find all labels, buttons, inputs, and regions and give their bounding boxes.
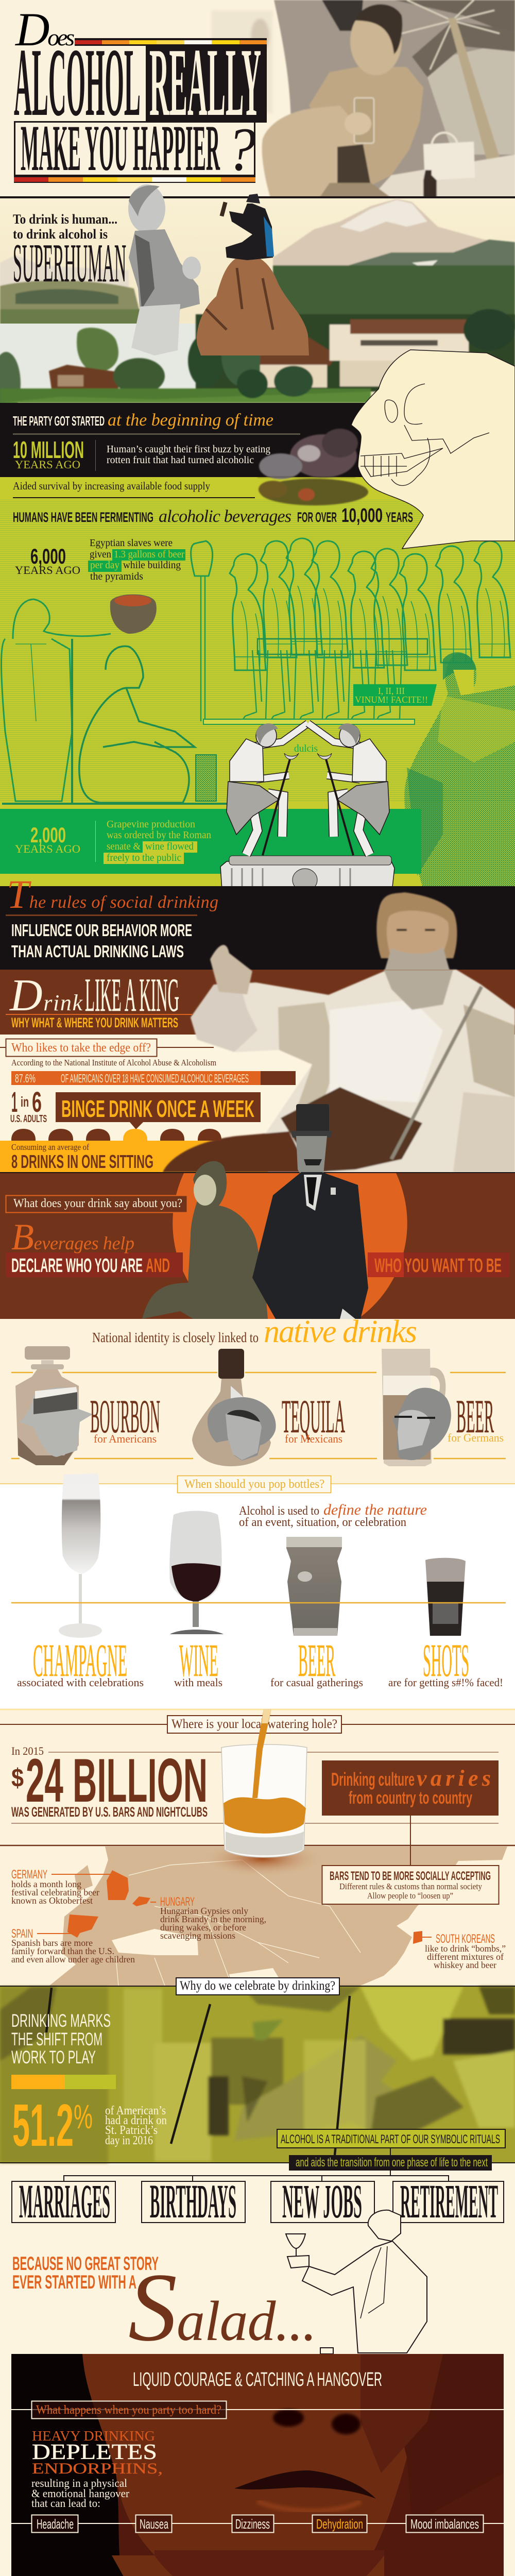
- text: st patricks: of American’s: [105, 2104, 166, 2117]
- panel: native drinks: BOURBON: [90, 1390, 160, 1443]
- band: 2,000 years ago: [0, 809, 421, 874]
- illustration: beer mug: [382, 1349, 451, 1466]
- label: spain: [11, 1927, 135, 1964]
- panel: when should you pop bottles: [0, 1473, 515, 1709]
- box: marriages: [12, 2175, 115, 2228]
- text: was generated: WAS GENERATED BY U.S. BARS AND NIGHTCLUBS: [11, 1804, 208, 1820]
- panel: native drinks: TEQUILA: [282, 1390, 345, 1443]
- illustration: statue: [128, 184, 201, 355]
- heading: heavy drinking depletes endorphins: ENDORPHINS,: [32, 2460, 163, 2477]
- label: spain: family forward than the U.S.: [11, 1946, 114, 1956]
- label: spain: and even allow under age children: [11, 1954, 135, 1964]
- text: alcohol is used: Alcohol is used to: [239, 1504, 319, 1518]
- text: resulting in: that can lead to:: [31, 2497, 100, 2510]
- text: national identity: National identity is closely linked to: [92, 1330, 259, 1345]
- label: south koreans: [425, 1932, 506, 1970]
- colour stripe bar bottom: [14, 175, 255, 183]
- band: 2,000 years ago: was ordered by the Roman: [107, 829, 211, 841]
- heading: to drink is human: To drink is human...: [13, 212, 117, 227]
- callout: drinking culture varies: Drinking culture: [331, 1769, 415, 1790]
- illustration: king face: [376, 892, 457, 974]
- callout box: who likes to take the edge off: Who likes to take the edge off?: [11, 1041, 151, 1055]
- label: germany: known as Oktoberfest: [11, 1895, 93, 1906]
- word: dulcis: dulcis: [294, 743, 318, 754]
- map: hungary: [132, 1896, 150, 1906]
- word: Does: Does: [14, 3, 75, 56]
- band right: [368, 1252, 509, 1277]
- heading: heavy drinking depletes endorphins: DEPLETES: [32, 2441, 157, 2464]
- stat: 1 in 6 adults: 1: [11, 1086, 18, 1118]
- heading: no great story: BECAUSE NO GREAT STORY: [12, 2253, 159, 2274]
- rule: [11, 1602, 506, 1603]
- left man: [227, 723, 308, 855]
- symptom: mood imbalances: Mood imbalances: [410, 2516, 479, 2532]
- callout box: bars tend: Different rules & customs than normal society: [339, 1882, 482, 1891]
- band left: [6, 1252, 183, 1277]
- caption: for mexicans: for Mexicans: [285, 1432, 342, 1445]
- band: 2,000 years ago: senate &: [107, 841, 141, 852]
- band: 2,000 years ago: wine flowed: [145, 841, 194, 852]
- heading: to drink alcohol is: to drink alcohol is: [13, 227, 108, 242]
- callout box: who likes to take the edge off: [0, 1039, 214, 1056]
- stat: 1 in 6 adults: [10, 1086, 47, 1125]
- label: germany: GERMANY: [11, 1868, 47, 1882]
- stat: 51.2 percent: 51.2: [12, 2092, 74, 2159]
- text: resulting in: & emotional hangover: [31, 2487, 130, 2500]
- box: make you happier: ?: [227, 115, 256, 183]
- script: Drink: Drink: [9, 971, 83, 1021]
- text: consuming an average: Consuming an average of: [11, 1142, 89, 1152]
- text: egyptian slaves with highlight: the pyramids: [90, 571, 143, 582]
- text: egyptian slaves with highlight: 1.3 gallons of beer: [114, 549, 184, 560]
- panel: when should you pop bottles: CHAMPAGNE: [33, 1635, 127, 1686]
- heading: for over: FOR OVER: [297, 510, 337, 525]
- symptom: nausea: Nausea: [140, 2516, 168, 2532]
- text: egyptian slaves with highlight: [88, 537, 185, 582]
- label: spain: SPAIN: [11, 1927, 33, 1941]
- dark panel behind REALLY: [146, 45, 267, 123]
- panel: drink like a king: LIKE A KING: [85, 969, 179, 1021]
- illustration: king body: [163, 945, 515, 1172]
- rule: [13, 497, 255, 498]
- script: beverages help: Beverages help: [11, 1216, 134, 1258]
- callout: binge drink: [56, 1092, 261, 1129]
- text: egyptian slaves with highlight: per day: [90, 560, 119, 571]
- stat: 1 in 6 adults: U.S. ADULTS: [10, 1113, 47, 1125]
- heading: drinking marks the shift: WORK TO PLAY: [11, 2047, 96, 2067]
- photo: cocktails at a bar: [0, 1987, 515, 2163]
- callout box: what does your drink say: What does your drink say about you?: [13, 1197, 182, 1210]
- illustration: tequila bottle: [192, 1349, 276, 1466]
- illustration: procession of workers: [191, 538, 510, 724]
- heading: heavy drinking depletes endorphins: [32, 2428, 163, 2477]
- heading: drinking marks the shift: [11, 2011, 111, 2067]
- text: egyptian slaves with highlight: while building: [123, 560, 181, 571]
- symptom: nausea: [136, 2515, 172, 2533]
- map: south korea: [413, 1931, 422, 1944]
- subheading: why what where: WHY WHAT & WHERE YOU DRINK MATTERS: [11, 1015, 178, 1030]
- label: germany: [11, 1868, 99, 1906]
- text: st patricks: day in 2016: [105, 2134, 153, 2147]
- panel: life transitions: [12, 2148, 504, 2362]
- photo: man under umbrella: [262, 0, 515, 198]
- bar: 51.2 percent: [11, 2075, 116, 2089]
- caption: casual gatherings: for casual gatherings: [270, 1676, 363, 1689]
- label: hungary: HUNGARY: [160, 1895, 195, 1909]
- panel: native drinks: [0, 1314, 515, 1484]
- heading: heavy drinking depletes endorphins: HEAVY DRINKING: [32, 2428, 155, 2444]
- stat: 6,000 years ago: YEARS AGO: [15, 564, 80, 577]
- panel: drink like a king: [0, 945, 515, 1173]
- panel: liquid courage dark poster: [0, 2354, 504, 2576]
- caption: celebrations: associated with celebrations: [17, 1676, 144, 1689]
- script: rules of social drinking: The rules of social drinking: [7, 872, 218, 917]
- label: years ago: YEARS AGO: [15, 458, 80, 471]
- panel: superhuman landscape: [0, 184, 515, 416]
- stat: 24 billion: 24 BILLION: [26, 1746, 208, 1815]
- map: europe and asia: [0, 1841, 515, 1986]
- map: spain: [67, 1914, 98, 1938]
- symptom: mood imbalances: [406, 2515, 483, 2533]
- illustration: roman statue: [404, 652, 515, 886]
- illustration: man with bottle: [220, 194, 274, 260]
- label: germany: holds a month long: [11, 1879, 81, 1889]
- panel: life transitions: BIRTHDAYS: [150, 2175, 236, 2228]
- panel: beginning of time: [0, 403, 515, 477]
- circle backdrop: [173, 1173, 407, 1319]
- bar: 87.6 percent: [11, 1071, 296, 1085]
- illustration: rock: [197, 255, 309, 355]
- callout box: bars tend: Allow people to “loosen up”: [367, 1891, 453, 1901]
- text: aided survival: Aided survival by increasing available food supply: [13, 480, 210, 492]
- script: salad: Salad...: [128, 2253, 317, 2362]
- panel: when should you pop bottles: BEER: [298, 1635, 335, 1686]
- illustration: man in top hat: [252, 1104, 368, 1319]
- panel: rules of social drinking: [0, 872, 515, 974]
- face: man with sombrero: [208, 1397, 276, 1461]
- symptom: headache: Headache: [37, 2516, 74, 2532]
- illustration: shot glass: [425, 1558, 466, 1636]
- text: st patricks: [105, 2104, 167, 2147]
- script: define the nature: define the nature: [323, 1501, 427, 1518]
- illustration: skull: [351, 350, 515, 549]
- illustration: rotting grapes: [258, 429, 368, 505]
- band: 2,000 years ago: freely to the public: [107, 852, 181, 863]
- callout box: bars tend: [322, 1866, 499, 1904]
- heading: and: AND: [146, 1255, 170, 1277]
- callout box: watering hole: Where is your local watering hole?: [171, 1717, 337, 1731]
- label: hungary: [160, 1895, 266, 1941]
- text: according to: According to the National Institute of Alcohol Abuse & Alcoholism: [11, 1058, 216, 1067]
- rule lines: [11, 1372, 506, 1459]
- map: glow under glass: [201, 1841, 324, 1877]
- bar: 87.6 percent: 87.6%: [15, 1072, 36, 1085]
- straws: [46, 1988, 350, 2155]
- heading: influence: INFLUENCE OUR BEHAVIOR MORE: [11, 921, 192, 940]
- heading: drinking marks the shift: THE SHIFT FROM: [11, 2029, 102, 2049]
- symptom: dizziness: Dizziness: [235, 2516, 270, 2532]
- panel: lime history section: [0, 477, 515, 886]
- illustration: face detail: [194, 1175, 216, 1206]
- callout box: pop bottles: When should you pop bottles?: [184, 1478, 324, 1491]
- stat: 10 million: 10 MILLION: [13, 436, 84, 463]
- caption: for americans: for Americans: [94, 1432, 157, 1445]
- illustration: toasting man line art: [286, 2210, 427, 2354]
- symptom: dehydration: [312, 2515, 367, 2533]
- faded background photo: [211, 10, 273, 113]
- callout: vinum facite: VINUM! FACITE!!: [355, 694, 428, 705]
- face: straw hat man: [20, 1387, 93, 1457]
- label: hungary: Hungarian Gypsies only: [160, 1906, 248, 1916]
- text: resulting in: resulting in a physical: [31, 2477, 127, 2489]
- stat: 1 in 6 adults: in: [21, 1094, 29, 1110]
- box: birthdays: [142, 2175, 245, 2228]
- band: 2,000 years ago: 2,000: [30, 823, 66, 847]
- bar: 87.6 percent: OF AMERICANS OVER 18 HAVE CONSUMED ALCOHOLIC BEVERAGES: [61, 1072, 249, 1085]
- text: st patricks: St. Patrick’s: [105, 2124, 158, 2137]
- text: of an event: of an event, situation, or celebration: [239, 1516, 406, 1529]
- panel: superhuman landscape: SUPERHUMAN: [13, 233, 126, 293]
- caption: for germans: for Germans: [448, 1431, 504, 1444]
- stat: 6,000 years ago: [15, 544, 80, 577]
- illustration: clay pot: [110, 595, 157, 634]
- heading: no great story: [12, 2253, 159, 2293]
- text: egyptian slaves with highlight: given: [90, 549, 111, 560]
- label: hungary: drink Brandy in the morning,: [160, 1914, 266, 1924]
- illustration: grape stompers: [220, 723, 394, 905]
- script: native drinks: native drinks: [264, 1314, 417, 1349]
- panel: when should you pop bottles: WINE: [179, 1635, 218, 1686]
- stat: 24 billion: $: [11, 1764, 24, 1792]
- caption: shots: are for getting s#!% faced!: [388, 1676, 503, 1689]
- face: bearded man: [392, 1388, 451, 1460]
- label: spain: Spanish bars are more: [11, 1938, 93, 1948]
- stat: 51.2 percent: [12, 2092, 93, 2159]
- colour stripe bar top: [75, 38, 267, 46]
- band: 2,000 years ago: YEARS AGO: [15, 842, 80, 855]
- panel: why do we celebrate photo: [0, 1978, 515, 2163]
- text: first buzz: Human’s caught their first buzz by eating: [107, 444, 270, 455]
- heading: declare who you are: DECLARE WHO YOU ARE: [11, 1255, 143, 1277]
- map: germany: [107, 1870, 129, 1900]
- text: resulting in: [31, 2477, 130, 2510]
- lake: [0, 324, 206, 391]
- symptom: headache: [32, 2515, 78, 2533]
- photo: red toned man in suit: [11, 2354, 504, 2576]
- label: south koreans: different mixtures of: [427, 1952, 504, 1962]
- right man: [308, 723, 389, 855]
- connector tree: [64, 2148, 449, 2181]
- callout box: why do we celebrate: Why do we celebrate by drinking?: [180, 1979, 335, 1993]
- illustration: mountains: [0, 199, 515, 330]
- stat: 51.2 percent: %: [74, 2097, 93, 2136]
- label: south koreans: like to drink “bombs,”: [425, 1943, 506, 1954]
- number: 10,000: 10,000: [341, 505, 383, 527]
- illustration: figure with pot: [1, 599, 111, 801]
- illustration: wine glass: [169, 1511, 224, 1634]
- panel: title header: [0, 0, 515, 198]
- panel: life transitions: MARRIAGES: [19, 2175, 110, 2228]
- heading: years: YEARS: [386, 510, 413, 525]
- label: south koreans: whiskey and beer: [434, 1960, 496, 1970]
- symptom row: [11, 2515, 504, 2533]
- callout: drinking culture varies: varies: [417, 1766, 491, 1791]
- illustration: whiskey glass: [221, 1709, 307, 1857]
- heading: no great story: EVER STARTED WITH A: [12, 2272, 136, 2293]
- callout: vinum facite: [353, 684, 437, 706]
- label: germany: festival celebrating beer: [11, 1887, 99, 1897]
- callout box: what happens: [11, 2401, 504, 2418]
- box: new jobs: [271, 2175, 374, 2228]
- callout box: what happens: What happens when you party too hard?: [36, 2403, 221, 2417]
- callout: vinum facite: I, II, III: [378, 686, 405, 696]
- text: st patricks: had a drink on: [105, 2114, 167, 2127]
- illustration: pint of beer: [286, 1537, 342, 1636]
- caption: with meals: with meals: [174, 1676, 222, 1689]
- callout: drinking culture varies: [322, 1760, 499, 1816]
- heading: drinking marks the shift: DRINKING MARKS: [11, 2011, 111, 2031]
- illustration: champagne flute: [59, 1473, 102, 1638]
- text: in 2015: In 2015: [11, 1744, 44, 1757]
- symptom: dehydration: Dehydration: [316, 2516, 363, 2532]
- script: at the beginning of time: at the beginning of time: [108, 411, 273, 430]
- heading: humans have been fermenting: HUMANS HAVE BEEN FERMENTING: [13, 510, 153, 525]
- label: hungary: scavenging missions: [160, 1930, 235, 1941]
- box: make you happier: [14, 112, 256, 184]
- panel: watering hole and map: [0, 1709, 515, 1986]
- text: rotten fruit: rotten fruit that had turned alcoholic: [107, 454, 254, 466]
- panel: what does your drink say: [0, 1104, 515, 1319]
- stat: 24 billion: [11, 1746, 208, 1815]
- grapes in tub: [229, 856, 391, 865]
- stat: 6,000 years ago: 6,000: [30, 544, 66, 568]
- village and trees: [0, 309, 515, 416]
- symptom: dizziness: [232, 2515, 274, 2533]
- illustration: bourbon decanter: [15, 1346, 93, 1465]
- pictogram: six adults: [11, 1129, 221, 1141]
- band: 2,000 years ago: Grapevine production: [107, 819, 195, 830]
- callout: binge drink: BINGE DRINK ONCE A WEEK: [61, 1095, 254, 1122]
- text: egyptian slaves with highlight: Egyptian slaves were: [90, 537, 173, 549]
- illustration: old engraved man: [142, 1161, 268, 1319]
- label: hungary: during wakes, or before: [160, 1922, 246, 1933]
- heading: the party got started: THE PARTY GOT STARTED: [13, 413, 105, 429]
- heading: than actual: THAN ACTUAL DRINKING LAWS: [11, 942, 184, 961]
- illustration: scribe: [2, 639, 227, 804]
- stat: 1 in 6 adults: 6: [32, 1086, 42, 1118]
- tub: [220, 861, 394, 905]
- heading: 8 drinks: 8 DRINKS IN ONE SITTING: [11, 1151, 153, 1172]
- script: alcoholic beverages: alcoholic beverages: [159, 507, 291, 526]
- panel: title header: ALCOHOL: [14, 28, 141, 136]
